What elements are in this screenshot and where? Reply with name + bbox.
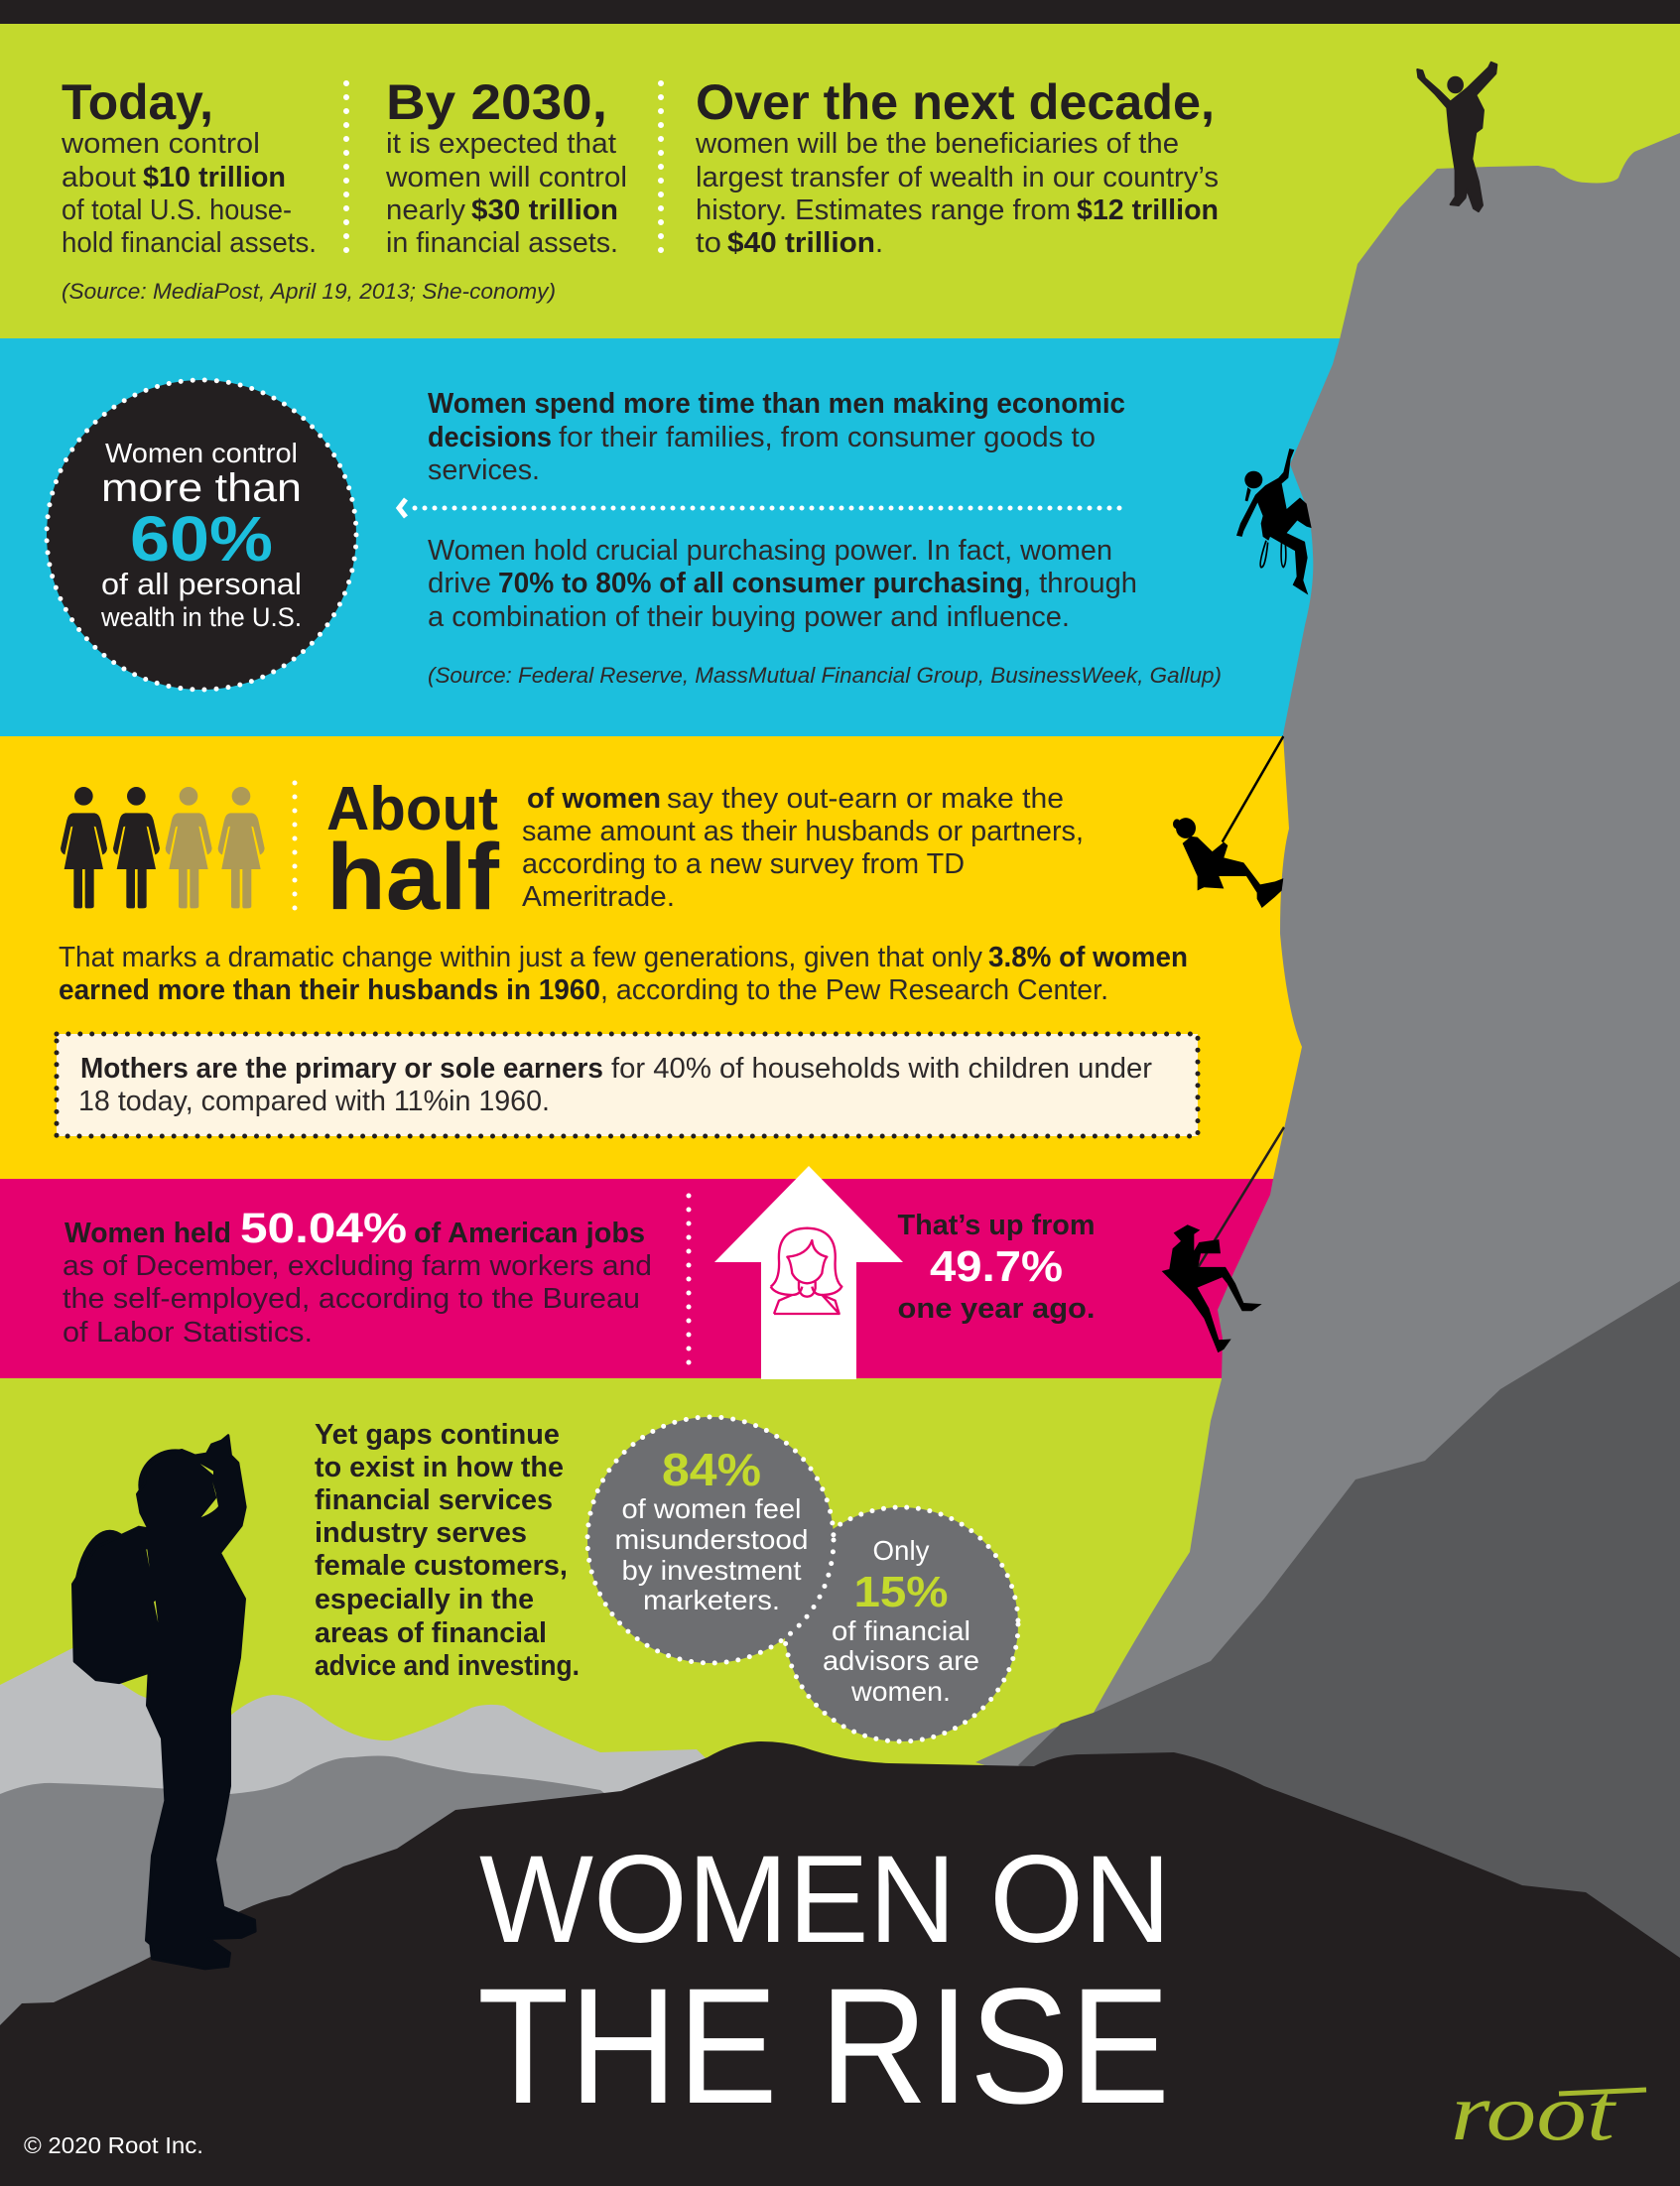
text: out-earn: according to a new survey from TD [522,848,965,880]
column: next decade: largest transfer of wealth in our country’s [696,162,1219,193]
text: up from: 49.7% [930,1242,1063,1291]
text: jobs share: the self-employed, according to the Bureau [63,1283,640,1315]
heading: about half [326,775,499,930]
arrow: dotted left [399,499,1125,517]
circle callout: 60%: Women control [105,438,298,468]
circle callout: 15%: advisors are [823,1645,979,1676]
callout: mothers: 18 today, compared with 11%in 1960. [78,1086,550,1117]
circle callout: 84%: marketers. [643,1585,780,1615]
text: dramatic change: That marks a dramatic change within just a few generations, given that only [59,942,982,973]
text: financial services gap: especially in the [315,1584,534,1615]
circle callout: 84%: misunderstood [615,1524,808,1555]
dark rock [1018,1281,1680,2004]
title [477,1831,1171,2138]
circle callout: 60%: more than [101,466,302,510]
band: pink [0,1179,1680,1378]
text: purchasing power: Women hold crucial purchasing power. In fact, women [428,535,1112,567]
text: economic decisions: Women spend more time than men making economic [428,388,1125,420]
column: next decade [695,74,1219,259]
heading: about half: About [326,775,498,843]
circle callout: 15%: women. [850,1676,951,1707]
text: economic decisions: decisions [428,422,552,453]
title: THE RISE [477,1955,1170,2138]
circle callout: 15%: Only [873,1535,929,1566]
source: (Source: MediaPost, April 19, 2013; She-conomy) [62,279,556,304]
text: economic decisions [428,388,1125,486]
column: next decade: women will be the beneficiaries of the [695,128,1179,160]
circle callout: 84%: by investment [621,1555,802,1586]
band: green top [0,24,1680,338]
text: purchasing power: drive [428,568,491,599]
column: next decade: $40 trillion [727,227,875,259]
logo: root [1451,2067,1646,2157]
callout: mothers: Mothers are the primary or sole earners [80,1053,603,1085]
column: today: women control [61,128,260,160]
column: 2030: it is expected that [386,128,616,160]
column: next decade: . [875,227,883,259]
circle callout: 15%: 15% [853,1568,949,1616]
circle callout: 15% [784,1507,1018,1741]
band: yellow [0,736,1680,1179]
source: (Source: Federal Reserve, MassMutual Financial Group, BusinessWeek, Gallup) [428,663,1222,688]
text: jobs share: Women held [65,1218,231,1249]
panel: jobs [63,1166,1096,1379]
text: out-earn [522,783,1084,913]
circle callout: 84%: of women feel [621,1493,802,1524]
icon: woman portrait [771,1228,841,1314]
mountains: mid grey [0,1756,635,2044]
text: economic decisions: for their families, from consumer goods to [559,422,1096,453]
column: 2030: $30 trillion [471,194,618,226]
text: up from: That’s up from [897,1210,1096,1241]
panel: gaps [315,1417,1018,1741]
mountain: black foreground [0,1741,1680,2186]
column: 2030: By 2030, [386,74,607,130]
column: today: of total U.S. house- [62,194,292,226]
arrow: up [714,1166,903,1379]
panel: earnings [57,775,1198,1136]
text: financial services gap: industry serves [315,1517,527,1549]
panel: top stats [61,74,1219,304]
panel: wealth [47,380,1222,690]
text: purchasing power: 70% to 80% of all consumer purchasing [498,568,1023,599]
icon: hiker with backpack [72,1436,255,1969]
circle callout: 60%: wealth in the U.S. [100,602,302,632]
text: out-earn: same amount as their husbands or partners, [522,816,1084,847]
column: today: about [62,162,136,193]
column: today [61,74,317,259]
text: financial services gap [315,1419,580,1682]
column: 2030 [385,74,627,259]
text: dramatic change [59,942,1188,1006]
text: financial services gap: to exist in how the [315,1452,564,1483]
top bar [0,0,1680,24]
text: financial services gap: areas of financial [315,1617,547,1649]
text: dramatic change: earned more than their husbands in 1960 [59,974,600,1006]
text: financial services gap: advice and investing. [315,1650,580,1682]
text: jobs share: of American jobs [414,1218,645,1249]
text: purchasing power: , through [1023,568,1137,599]
text: jobs share [63,1205,652,1349]
column: next decade: to [696,227,721,259]
column: next decade: $12 trillion [1077,194,1219,226]
title: WOMEN ON [479,1831,1171,1969]
copyright: © 2020 Root Inc. [24,2132,203,2158]
text: economic decisions: services. [428,454,540,486]
circle callout: 60%: of all personal [101,567,302,601]
icon: four women figures [61,787,265,908]
text: dramatic change: , according to the Pew Research Center. [600,974,1108,1006]
band: green bottom [0,1378,1680,1795]
cliff [975,133,1680,1985]
icon: rope climber seated [1173,736,1283,908]
text: up from [897,1210,1096,1325]
text: out-earn: say they out-earn or make the [667,783,1064,815]
circle callout: 84%: 84% [662,1444,761,1495]
column: 2030: in financial assets. [386,227,618,259]
text: purchasing power [428,535,1137,633]
column: next decade: Over the next decade, [696,74,1215,130]
mountains: light grey [0,1648,734,1885]
circle callout: 15%: of financial [832,1615,970,1646]
logo: root: root [1451,2067,1617,2157]
divider [292,783,298,910]
column: 2030: women will control [385,162,627,193]
circle callout: 60%: 60% [130,503,273,575]
callout: mothers [57,1034,1198,1136]
band: cyan [0,338,1680,736]
text: jobs share: 50.04% [240,1205,407,1252]
column: 2030: nearly [386,194,465,226]
column: today: hold financial assets. [62,227,317,259]
callout: mothers: for 40% of households with children under [611,1053,1152,1085]
circle callout: 84% [587,1417,834,1663]
text: jobs share: as of December, excluding farm workers and [63,1250,652,1282]
divider [687,1196,691,1364]
text: jobs share: of Labor Statistics. [63,1317,313,1349]
text: out-earn: Ameritrade. [522,881,675,913]
column: today: $10 trillion [143,162,286,193]
heading: about half: half [326,825,499,930]
icon: summit figure [1417,63,1496,211]
text: financial services gap: Yet gaps continue [315,1419,560,1451]
text: financial services gap: female customers, [315,1550,568,1582]
icon: rope climber climbing [1162,1127,1284,1352]
divider [658,83,664,252]
text: financial services gap: financial services [315,1484,553,1516]
text: purchasing power: a combination of their buying power and influence. [428,601,1070,633]
column: today: Today, [62,74,213,130]
icon: climber on wall [1236,449,1312,594]
divider [343,83,349,252]
column: next decade: history. Estimates range from [696,194,1071,226]
circle callout: 60% [47,380,356,690]
text: dramatic change: 3.8% of women [988,942,1188,973]
text: out-earn: of women [527,783,661,815]
text: up from: one year ago. [897,1293,1096,1325]
